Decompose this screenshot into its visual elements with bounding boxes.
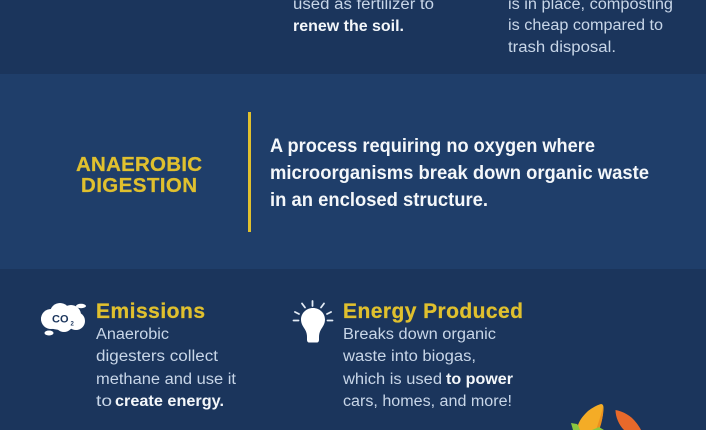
icon: autumn leaf xyxy=(616,410,641,430)
text block: fertilizer benefit xyxy=(293,0,434,35)
icon: corn cob xyxy=(571,404,604,430)
definition text xyxy=(270,136,649,211)
text block: fertilizer benefit: renew the soil. xyxy=(293,18,404,35)
text block: emissions description: Anaerobic xyxy=(96,326,169,343)
text block: emissions description: to xyxy=(96,393,112,410)
heading: anaerobic digestion xyxy=(76,153,202,197)
text block: composting cost: trash disposal. xyxy=(508,39,616,56)
definition text: A process requiring no oxygen where xyxy=(270,136,595,157)
text block: emissions description: digesters collect xyxy=(96,348,219,365)
text block: composting cost: is cheap compared to xyxy=(508,17,663,34)
text block: emissions description xyxy=(96,326,237,410)
definition text: in an enclosed structure. xyxy=(270,190,488,211)
text block: energy description: to power xyxy=(446,371,513,388)
text block: energy description: which is used xyxy=(342,371,442,388)
icon: CO2 cloud: CO xyxy=(52,314,69,326)
vertical divider xyxy=(248,112,251,232)
panel: energy produced xyxy=(294,300,523,410)
top band background xyxy=(0,0,706,74)
icon: light bulb xyxy=(294,301,332,342)
text block: energy description: cars, homes, and more! xyxy=(343,393,512,410)
text block: emissions description: create energy. xyxy=(115,393,224,410)
text block: emissions description: methane and use it xyxy=(96,371,237,388)
text block: composting cost xyxy=(508,0,673,56)
heading: anaerobic digestion: ANAEROBIC xyxy=(76,153,202,176)
icon: CO2 cloud xyxy=(41,303,86,336)
panel: anaerobic digestion definition xyxy=(0,74,706,269)
text block: energy description: waste into biogas, xyxy=(342,348,476,365)
icon: CO2 cloud: 2 xyxy=(70,322,74,328)
panel: emissions xyxy=(41,300,237,410)
text block: energy description: Breaks down organic xyxy=(343,326,496,343)
definition text: microorganisms break down organic waste xyxy=(270,163,649,184)
text block: energy description xyxy=(342,326,513,410)
heading: anaerobic digestion: DIGESTION xyxy=(81,174,197,197)
heading: emissions: Emissions xyxy=(96,300,205,323)
heading: energy produced: Energy Produced xyxy=(343,300,523,323)
